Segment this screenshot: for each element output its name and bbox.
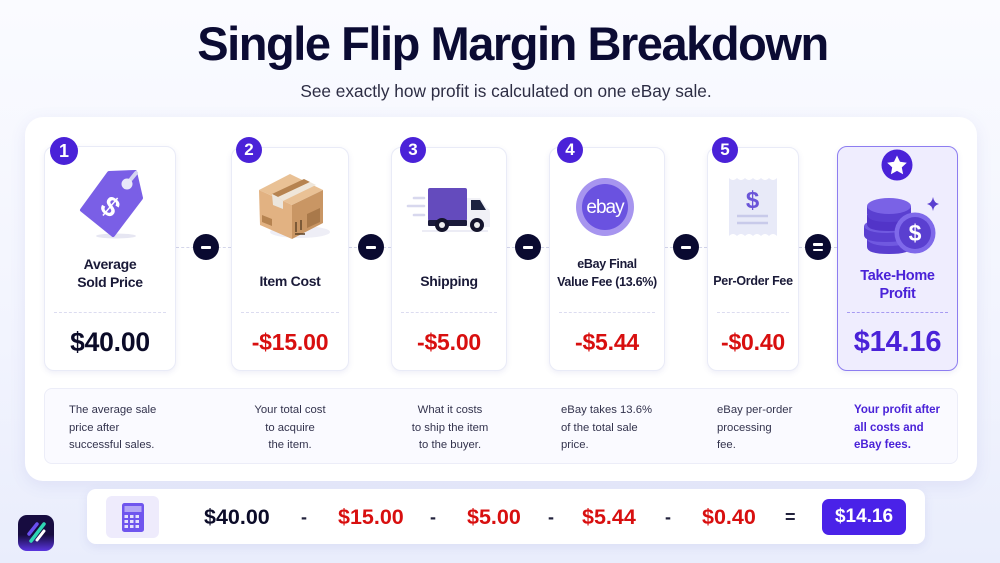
formula: equals: = [785,507,796,527]
badge 4: 4 [565,140,575,159]
icon: price tag: $ [94,190,127,224]
description 1: The average sale [69,404,156,416]
formula: item cost: $15.00 [338,505,404,529]
icon: eBay coin [576,178,634,236]
label: Take-Home [860,268,935,284]
label: Per-Order Fee [713,274,793,288]
description 2: Your total cost [254,404,326,416]
description 4: of the total sale [561,422,638,434]
label: Shipping [420,273,478,289]
icon: coin stack [864,197,939,254]
label: Profit [879,286,916,302]
badge 1 [50,137,78,165]
icon: logo [18,515,54,551]
title: Single Flip Margin Breakdown [197,17,828,70]
description 2: the item. [268,439,312,451]
icon: receipt [729,178,777,236]
operator: minus [515,234,541,260]
card 1: average sold price [44,146,176,371]
description 1: successful sales. [69,439,154,451]
description 1 [69,404,156,451]
badge 5: 5 [720,140,730,159]
icon: truck [406,188,490,232]
description 6 [854,404,940,451]
badge 2: 2 [244,140,254,159]
icon: box [259,174,330,239]
icon: coin stack: $ [909,220,922,246]
formula: result: $14.16 [835,506,893,527]
main panel [25,117,977,481]
description 4: price. [561,439,589,451]
badge 3: 3 [408,140,418,159]
description 2: to acquire [265,422,315,434]
description 3: to the buyer. [419,439,481,451]
label [557,257,657,289]
formula: result [822,499,906,535]
value: -$0.40 [721,329,785,355]
value: -$5.00 [417,329,481,355]
card 3: shipping [391,147,507,371]
value: -$5.44 [575,329,639,355]
badge 1: 1 [59,141,69,161]
formula: minus: - [548,507,554,527]
label: Average [84,256,136,272]
formula: minus: - [301,507,307,527]
label: Sold Price [77,274,143,290]
label [77,256,143,290]
subtitle: See exactly how profit is calculated on one eBay sale. [300,81,712,101]
badge 3 [400,137,426,163]
description 3 [412,404,488,451]
label: Value Fee (13.6%) [557,275,657,289]
operator: equals [805,234,831,260]
description 3: What it costs [418,404,482,416]
description 5 [717,404,792,451]
formula: shipping: $5.00 [467,505,521,529]
icon: receipt: $ [746,187,760,214]
description 5: processing [717,422,772,434]
description 5: fee. [717,439,736,451]
description panel [44,388,958,464]
card 6: take-home profit [837,146,958,371]
operator: minus [358,234,384,260]
formula: minus: - [665,507,671,527]
badge 4 [557,137,583,163]
description 6: eBay fees. [854,439,911,451]
icon: price tag [80,170,143,238]
formula: sold price: $40.00 [204,505,270,529]
icon: eBay coin: ebay [586,197,625,218]
description 2 [254,404,326,451]
card 5: per-order fee [707,147,799,371]
formula bar [87,489,925,544]
description 5: eBay per-order [717,404,792,416]
badge: star [882,150,912,180]
description 4: eBay takes 13.6% [561,404,652,416]
operator: minus [673,234,699,260]
value: -$15.00 [252,329,328,355]
description 6: Your profit after [854,404,940,416]
operator: minus [193,234,219,260]
icon: calculator [106,496,159,538]
card 2: item cost [231,147,349,371]
description 3: to ship the item [412,422,488,434]
badge 2 [236,137,262,163]
label [860,268,935,302]
label: eBay Final [577,257,637,271]
badge 5 [712,137,738,163]
card 4: eBay final value fee [549,147,665,371]
label: Item Cost [259,273,321,289]
formula: eBay fee: $5.44 [582,505,636,529]
description 6: all costs and [854,422,924,434]
description 1: price after [69,422,119,434]
value: $14.16 [854,326,941,358]
formula: minus: - [430,507,436,527]
description 4 [561,404,652,451]
value: $40.00 [70,327,150,357]
formula: per-order fee: $0.40 [702,505,756,529]
